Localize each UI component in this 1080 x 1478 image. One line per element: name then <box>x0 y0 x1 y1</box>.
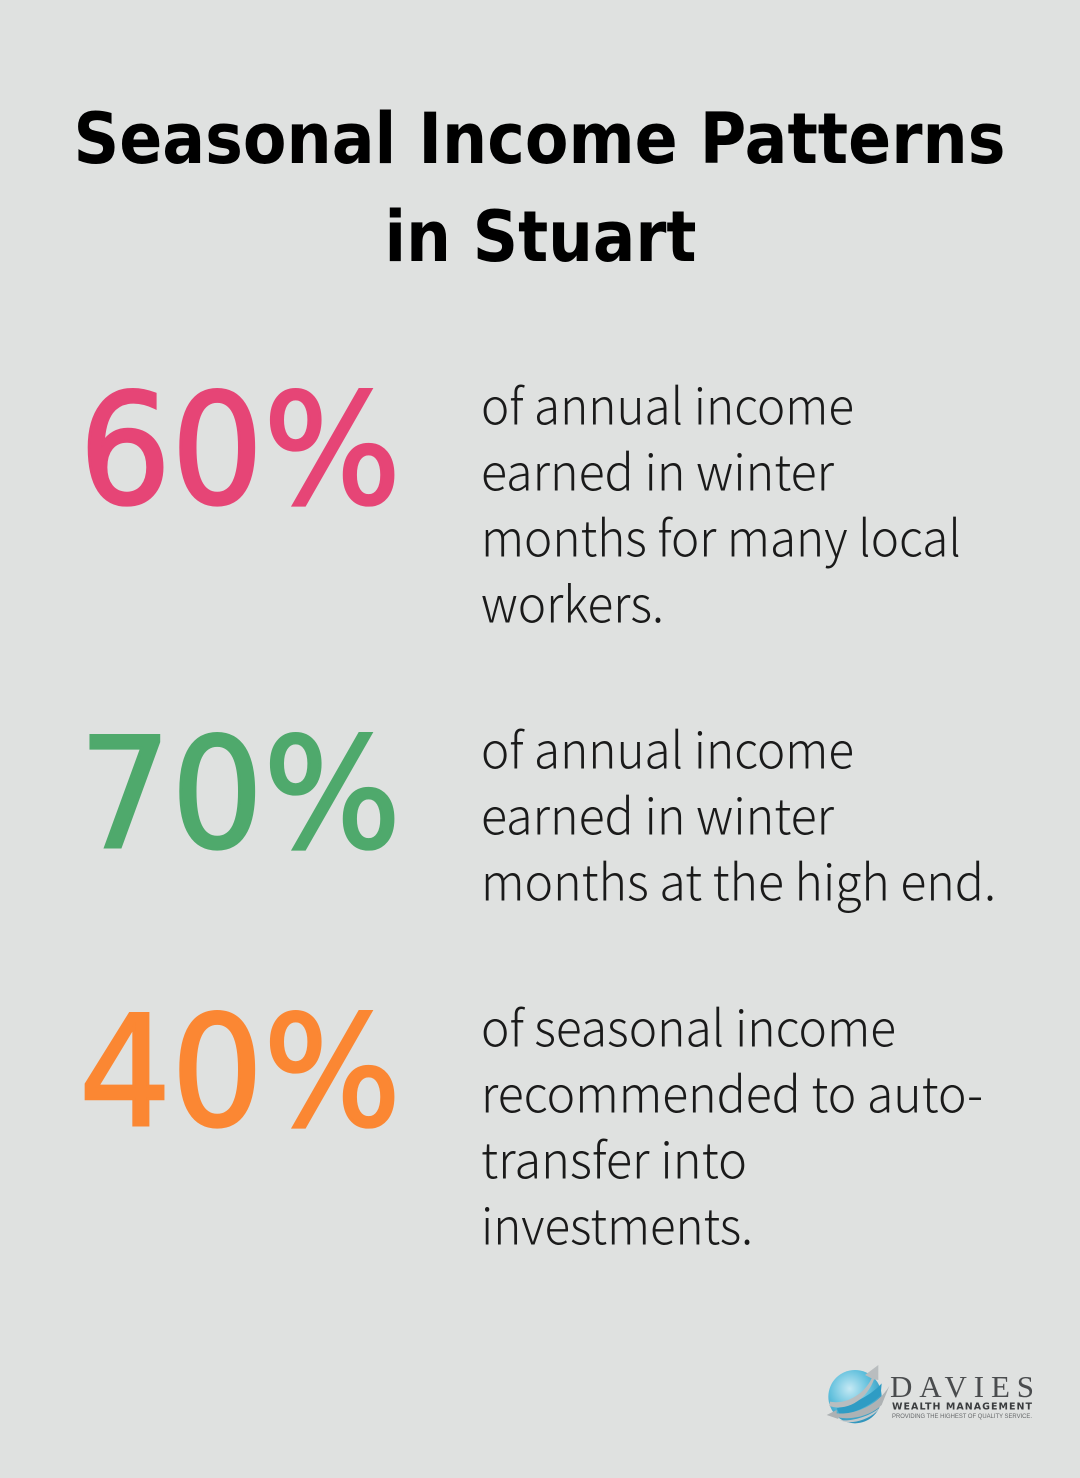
text: 40% description: of seasonal income <box>481 990 896 1062</box>
text: 40% description: transfer into <box>481 1122 747 1194</box>
title: Seasonal Income Patterns <box>74 98 1006 180</box>
wordmark: DAVIES <box>890 1369 1034 1404</box>
text: 40% description: recommended to auto- <box>481 1056 983 1128</box>
stat: 70% <box>79 706 996 916</box>
stat: 40% <box>79 984 983 1260</box>
text: 60% description: workers. <box>481 566 664 638</box>
logo: Davies Wealth Management <box>827 1365 1034 1423</box>
tagline: PROVIDING THE HIGHEST OF QUALITY SERVICE. <box>892 1413 1032 1420</box>
text: 60% description <box>481 368 961 638</box>
title: in Stuart <box>384 196 696 278</box>
number: 60%: 60% <box>79 362 401 540</box>
stat: 60% <box>79 362 961 638</box>
text: 70% description <box>481 712 996 916</box>
number: 70%: 70% <box>79 706 401 884</box>
icon: globe with arrows <box>827 1365 889 1423</box>
text: 60% description: months for many local <box>481 500 961 572</box>
title <box>74 98 1006 278</box>
text: 60% description: earned in winter <box>481 434 835 506</box>
subtitle: WEALTH MANAGEMENT <box>892 1402 1033 1412</box>
text: 60% description: of annual income <box>481 368 854 440</box>
text: 70% description: months at the high end. <box>481 844 996 916</box>
text: 70% description: of annual income <box>481 712 854 784</box>
text: 40% description <box>481 990 983 1260</box>
number: 40%: 40% <box>79 984 401 1162</box>
text: 40% description: investments. <box>481 1188 753 1260</box>
text: 70% description: earned in winter <box>481 778 835 850</box>
